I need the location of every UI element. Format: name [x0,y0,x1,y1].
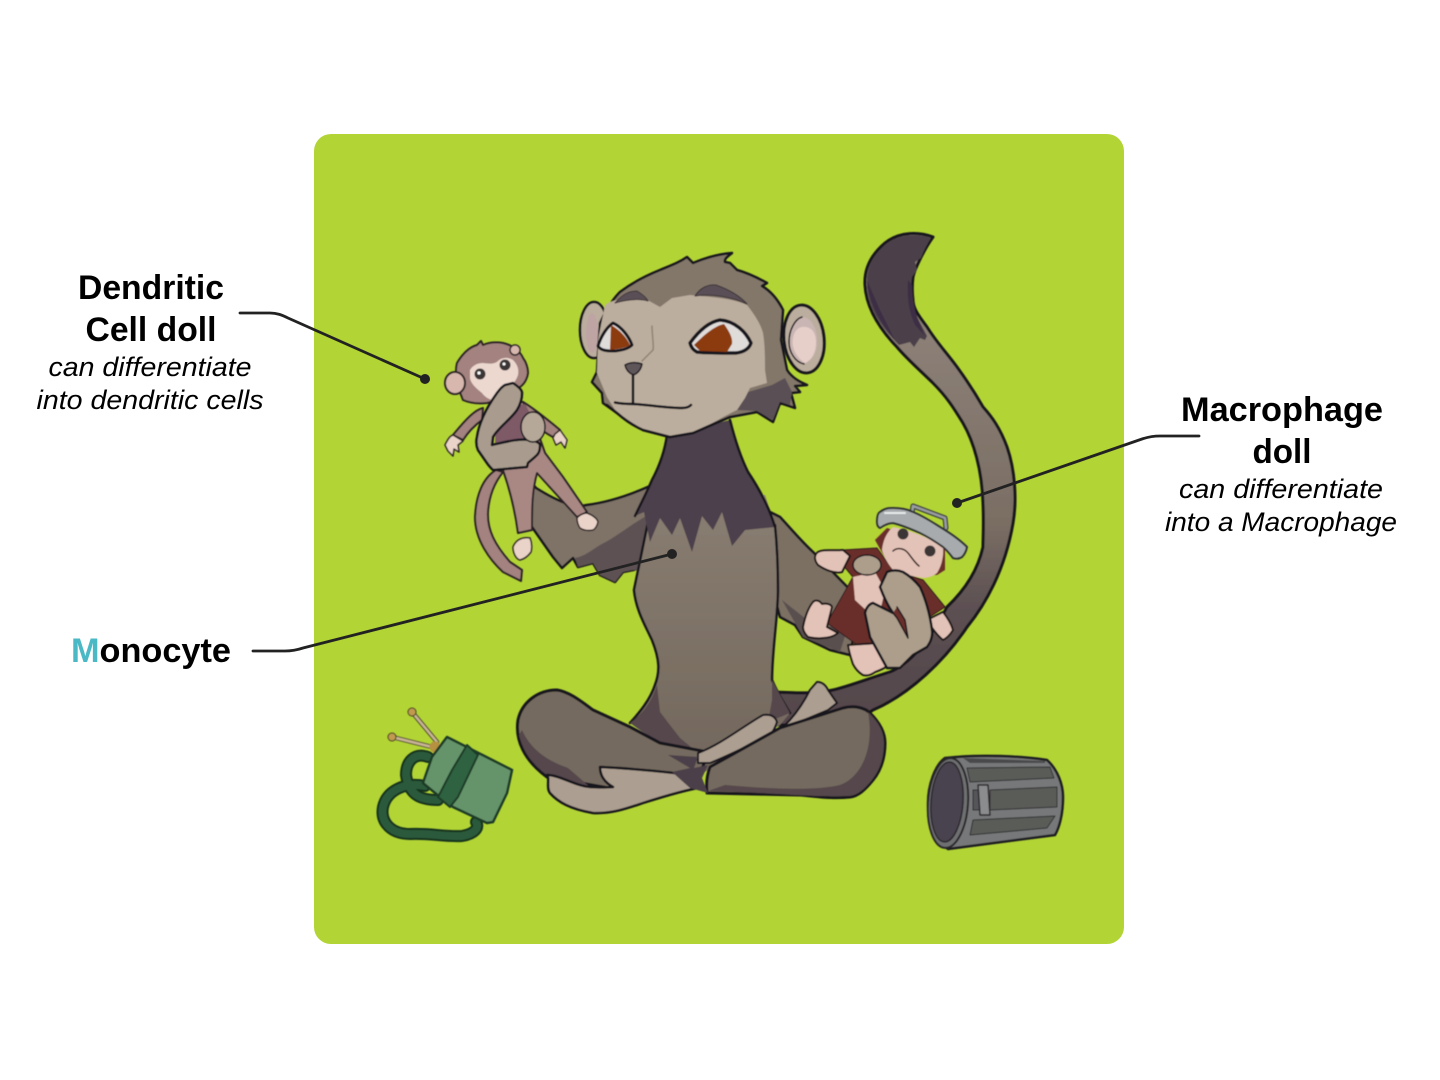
label: monocyte: Monocyte [71,632,231,670]
discarded trash can [925,756,1063,849]
label: dendritic cell doll: can differentiate [48,352,252,382]
label: macrophage doll: into a Macrophage [1165,507,1397,537]
chest side outlines [635,420,775,527]
can panels [967,767,1057,835]
panel: green background [314,134,1124,944]
label: dendritic cell doll: Dendritic [78,269,224,307]
monkey right arm [770,512,860,655]
pack body [423,737,512,823]
label: macrophage doll: can differentiate [1179,474,1383,504]
dark tail tip [867,235,931,347]
top dark stripe [963,758,1045,763]
monkey left eye [598,323,632,351]
discarded green backpack with antennae [383,708,512,836]
leader line: dendritic cell doll [240,313,430,384]
leader line: macrophage doll [952,436,1199,508]
monkey right foot upper toes [698,715,777,763]
doll shoulder knob [853,555,881,575]
doll tail [475,470,522,581]
doll torn patch [853,572,885,612]
monkey face [597,295,767,437]
fur tuft between legs [668,755,708,793]
dendritic cell doll [445,341,598,581]
monkey right leg [707,707,885,798]
doll hair [875,528,945,575]
leader line: monocyte [253,549,677,651]
monkey right ear [781,303,827,375]
doll face [882,527,943,578]
doll legs and body [500,402,587,533]
can body [928,756,1063,849]
monkey right eye [690,320,751,353]
monkey thumb [521,412,545,442]
left leg shadow [519,730,590,787]
dark waist shading [630,680,790,752]
monkey head fur [592,253,807,437]
label: macrophage doll: Macrophage [1181,391,1383,429]
monkey right eyebrow [695,285,747,304]
cable [383,756,477,836]
doll ears [445,372,465,394]
label: dendritic cell doll: into dendritic cells [36,385,264,415]
can handle [973,785,990,815]
doll head [456,341,528,403]
doll arms [453,402,560,440]
monkey right hand holding doll [865,570,932,668]
monkey chest and neck [635,420,775,552]
monkey right foot heel [780,682,837,730]
monkey left arm [510,470,660,582]
left arm shadow [575,515,648,582]
monkey left leg [517,690,708,790]
monkey nose and mouth [615,326,691,408]
label: dendritic cell doll [36,269,264,415]
label: macrophage doll: doll [1252,433,1312,471]
doll belly [495,404,540,445]
torso side outlines [630,522,790,723]
monkey left hand holding doll [476,383,540,470]
monkey tail [775,233,1015,725]
doll lid hat [877,506,967,559]
doll hands and feet [445,430,598,560]
hand finger gap [893,607,908,638]
doll face [470,358,518,400]
monkey left eyebrow [615,291,648,303]
monkey left foot [547,767,703,813]
macrophage doll [803,506,967,675]
illustration: monocyte monkey [383,233,1063,849]
can rim [925,757,971,849]
doll body [827,548,945,650]
tail tip side shade [867,280,925,340]
doll hands and feet [803,550,953,675]
can opening [928,761,966,843]
jaw shadow [737,378,792,420]
monkey torso [630,495,790,775]
label: dendritic cell doll: Cell doll [86,311,216,349]
monkey left ear [580,302,608,358]
right arm shadow [782,600,850,652]
label: macrophage doll [1165,391,1397,537]
pack strap [438,745,478,807]
right leg shadow [708,712,884,796]
antenna rods [392,712,437,747]
